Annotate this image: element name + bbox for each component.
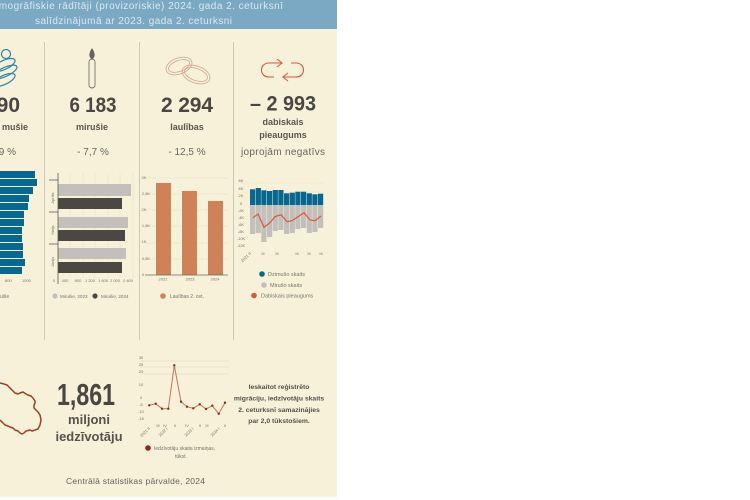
bar chart: deaths — [49, 173, 134, 299]
bar chart: deaths: Maijs — [50, 225, 55, 235]
stat: population: iedzīvotāju — [56, 429, 123, 444]
bar chart: deaths: 1 200 — [85, 278, 96, 283]
bar chart: marriages: 2023 — [186, 276, 195, 282]
stat: population: miljoni — [68, 412, 110, 427]
bar chart: deaths: Aprīlis — [50, 192, 55, 204]
stat: marriages: laulības — [170, 122, 204, 132]
line chart: population change: 2024 I — [209, 426, 221, 438]
bar chart: marriages — [142, 175, 228, 300]
combo chart: natural increase: 8K — [239, 178, 244, 183]
stat: deaths: - 7,7 % — [77, 147, 109, 158]
combo chart: natural increase: 2K — [239, 193, 244, 198]
stat: population: 1,861 — [57, 377, 115, 412]
line chart: population change: Iedzīvotāju skaita izmaiņas, — [154, 446, 215, 452]
combo chart: natural increase: Mirušo skaits — [270, 283, 302, 289]
combo chart: natural increase: -2K — [238, 208, 244, 213]
combo chart: natural increase: -6K — [238, 222, 244, 227]
combo chart: natural increase: -12K — [237, 243, 246, 248]
stat: natural increase: joprojām negatīvs — [240, 147, 325, 158]
text: migration note: 2. ceturksnī samazinājies — [238, 407, 320, 414]
icon: cycle arrows — [262, 59, 304, 81]
stat: natural increase: dabiskais — [262, 117, 304, 127]
map: Latvia outline — [0, 383, 41, 434]
source: Centrālā statistikas pārvalde, 2024 — [66, 476, 205, 486]
combo chart: natural increase: 2021 II — [240, 251, 252, 263]
stat: natural increase — [240, 92, 325, 158]
combo chart: natural increase: III — [307, 251, 311, 256]
line chart: population change: -10 — [138, 409, 145, 414]
text: migration note: par 2,0 tūkstošiem. — [248, 418, 310, 425]
stat: deaths: mirušie — [76, 122, 108, 132]
bar chart: deaths: Mirušie, 2023 — [60, 294, 88, 299]
line chart: population change: III — [156, 423, 160, 428]
header banner: salīdzinājumā ar 2023. gada 2. ceturksni — [35, 16, 232, 27]
line chart: population change: II — [174, 423, 176, 428]
bar chart: deaths: 2 400 — [123, 278, 134, 283]
bar chart: births — [0, 171, 37, 300]
bar chart: marriages: 1,5K — [142, 223, 150, 228]
bar chart: marriages: 2024 — [211, 276, 220, 282]
stat: births — [0, 94, 28, 158]
combo chart: natural increase: -4K — [238, 215, 244, 220]
bar chart: deaths: Jūnijs — [50, 257, 55, 267]
bar chart: births: 1000 — [22, 278, 32, 283]
bar chart: marriages: 0 — [142, 272, 145, 277]
bar chart: births: 800 — [5, 278, 12, 283]
stat: deaths: 6 183 — [70, 94, 116, 117]
combo chart: natural increase: III — [275, 251, 279, 256]
text: migration note: migrāciju, iedzīvotāju skaits — [234, 396, 324, 402]
icon: baby toy — [0, 50, 19, 89]
line chart: population change: IV — [185, 423, 189, 428]
combo chart: natural increase: III — [319, 251, 323, 256]
combo chart: natural increase: III — [261, 251, 265, 256]
line chart: population change: 25 — [139, 362, 144, 367]
combo chart: natural increase: -8K — [238, 229, 244, 234]
bar chart: marriages: 3K — [142, 175, 147, 180]
line chart: population change: 2023 I — [183, 426, 195, 438]
bar chart: deaths: 0 — [53, 278, 56, 283]
line chart: population change: 2021 II — [139, 426, 151, 438]
stat: natural increase: – 2 993 — [250, 92, 316, 116]
combo chart: natural increase — [237, 178, 323, 300]
bar chart: marriages: 2,5K — [142, 191, 150, 196]
line chart: population change: tūkst. — [175, 454, 187, 460]
bar chart: marriages: 1K — [142, 239, 147, 244]
bar chart: deaths: Mirušie, 2024 — [101, 294, 129, 299]
stat: natural increase: pieaugums — [259, 130, 307, 140]
combo chart: natural increase: Dzimušo skaits — [268, 272, 305, 278]
bar chart: deaths: 2 000 — [110, 278, 121, 283]
stat: marriages — [161, 94, 213, 158]
bar chart: marriages: Laulības 2. cet. — [170, 294, 204, 300]
line chart: population change: 10 — [139, 382, 144, 387]
line chart: population change: II — [199, 423, 201, 428]
bar chart: deaths: 800 — [75, 278, 82, 283]
stat: marriages: 2 294 — [161, 94, 213, 117]
text: migration note — [234, 383, 324, 425]
stat: marriages: - 12,5 % — [168, 147, 206, 158]
icon: wedding rings — [164, 54, 213, 87]
combo chart: natural increase: 6K — [239, 186, 244, 191]
stat: population — [56, 377, 123, 444]
panel: background — [0, 0, 337, 497]
combo chart: natural increase: 0 — [240, 201, 243, 206]
header banner — [0, 0, 337, 29]
line chart: population change: -5 — [139, 402, 144, 407]
line chart: population change: II — [224, 423, 226, 428]
line chart: population change: III — [205, 423, 209, 428]
combo chart: natural increase: Dabiskais pieaugums — [261, 294, 314, 300]
line chart: population change: 2022 I — [157, 426, 169, 438]
stat: deaths — [70, 94, 116, 158]
line chart: population change: 30 — [139, 355, 144, 360]
bar chart: deaths: 1 600 — [98, 278, 109, 283]
line chart: population change: 0 — [140, 395, 143, 400]
icon: candle — [89, 48, 95, 88]
bar chart: marriages: 0,5K — [142, 256, 150, 261]
line chart: population change — [138, 355, 229, 460]
bar chart: deaths: 400 — [62, 278, 69, 283]
combo chart: natural increase: III — [295, 251, 299, 256]
line chart: population change: -15 — [138, 416, 145, 421]
line chart: population change: IV — [163, 423, 167, 428]
bar chart: marriages: 2022 — [159, 276, 168, 282]
text: migration note: Ieskaitot reģistrēto — [249, 383, 309, 391]
line chart: population change: 20 — [139, 369, 144, 374]
bar chart: marriages: 2K — [142, 207, 147, 212]
stat: births: mušie — [2, 122, 28, 132]
bar chart: births: ušie — [0, 294, 9, 300]
combo chart: natural increase: -10K — [237, 236, 246, 241]
